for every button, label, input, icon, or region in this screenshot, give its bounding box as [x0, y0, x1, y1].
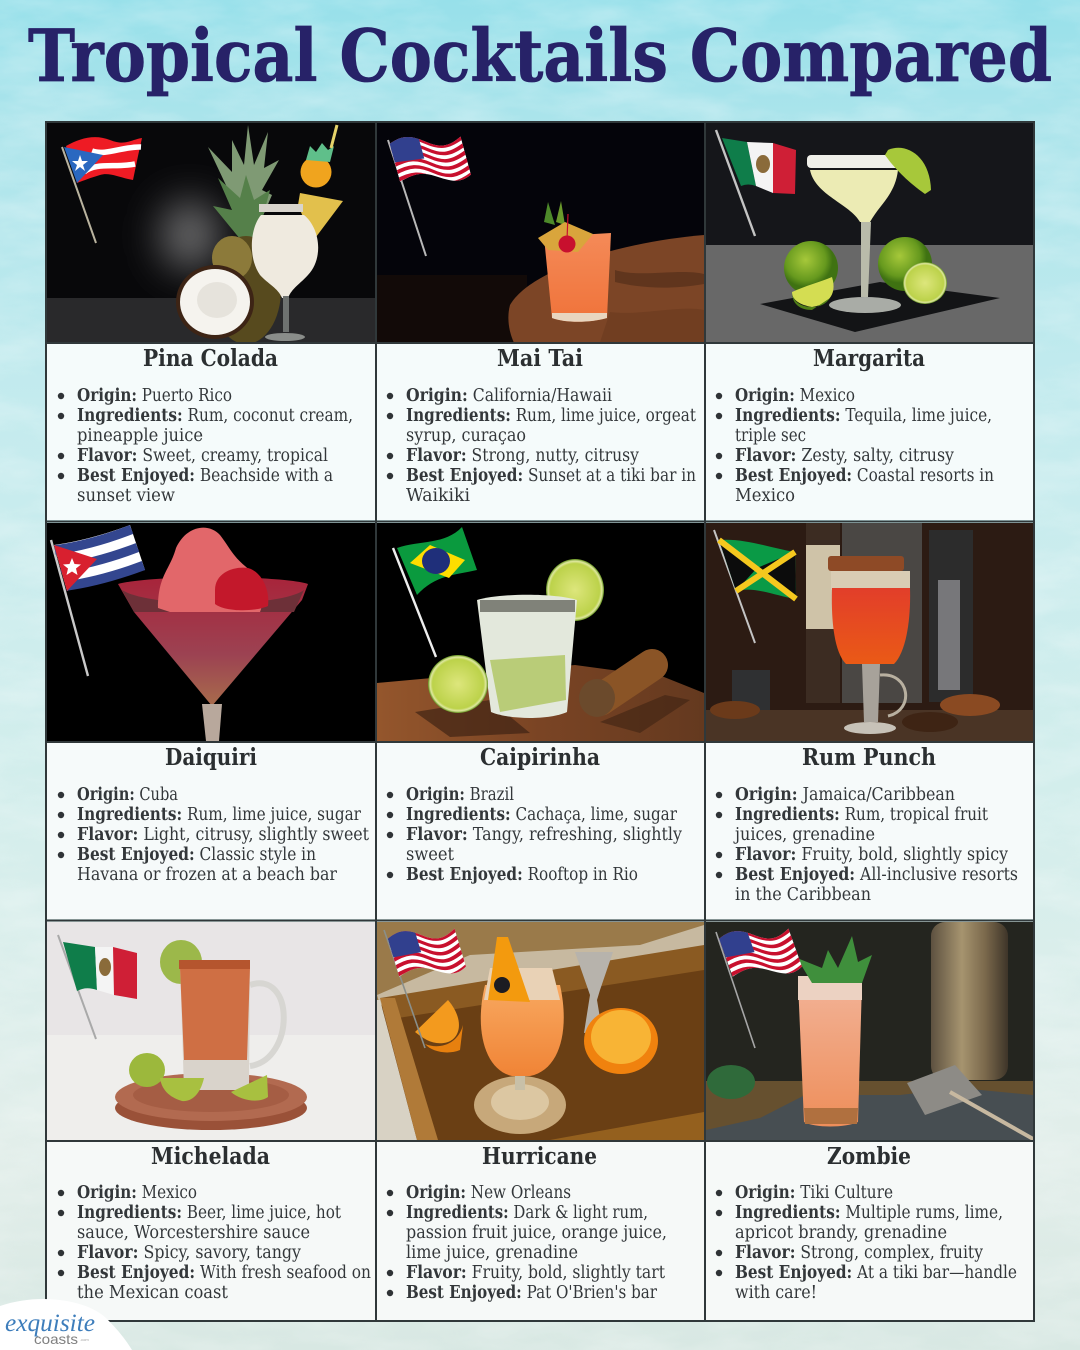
facts list: Flavor: Fruity, bold, slightly tart — [406, 1263, 665, 1283]
flag: Cuba — [51, 525, 145, 676]
logo: exquisite coasts — [0, 1299, 132, 1350]
facts list: Best Enjoyed: Rooftop in Rio — [406, 865, 638, 885]
facts list: sweet — [406, 845, 454, 865]
facts list: Ingredients: Multiple rums, lime, — [735, 1203, 1003, 1223]
text panel — [706, 1142, 1033, 1320]
heading: Daiquiri — [165, 744, 257, 771]
panel: Margarita — [706, 123, 1033, 520]
facts list: Flavor: Strong, complex, fruity — [735, 1243, 983, 1263]
heading: Pina Colada — [143, 345, 278, 372]
facts list: Origin: Cuba — [77, 785, 178, 805]
facts list: Best Enjoyed: Coastal resorts in — [735, 466, 994, 486]
facts list: with care! — [735, 1283, 817, 1303]
flag: Mexico — [58, 935, 137, 1039]
panel: Michelada — [47, 922, 375, 1320]
flag: Brazil — [393, 527, 477, 657]
facts list — [387, 1183, 667, 1303]
text panel — [47, 743, 375, 919]
text panel — [706, 344, 1033, 520]
flag: Jamaica — [714, 530, 796, 643]
facts list: syrup, curaçao — [406, 426, 526, 446]
facts list: lime juice, grenadine — [406, 1243, 578, 1263]
facts list — [58, 785, 369, 885]
facts list: Origin: Mexico — [77, 1183, 197, 1203]
facts list: apricot brandy, grenadine — [735, 1223, 947, 1243]
panel: Pina Colada — [47, 123, 375, 520]
panel: Mai Tai — [377, 123, 704, 520]
facts list: Flavor: Spicy, savory, tangy — [77, 1243, 301, 1263]
photo: mai tai on round wood table — [377, 123, 704, 345]
heading: Hurricane — [482, 1143, 597, 1170]
facts list: sunset view — [77, 486, 175, 506]
facts list: Best Enjoyed: Beachside with a — [77, 466, 333, 486]
flag: Puerto Rico — [62, 137, 142, 243]
photo: frozen strawberry daiquiri — [47, 523, 375, 741]
facts list: Origin: Brazil — [406, 785, 514, 805]
facts list — [58, 1183, 371, 1303]
flag: United States — [715, 928, 802, 1048]
facts list: Flavor: Strong, nutty, citrusy — [406, 446, 639, 466]
text panel — [706, 743, 1033, 919]
facts list: Mexico — [735, 486, 795, 506]
text panel — [47, 344, 375, 520]
text panel — [377, 1142, 704, 1320]
facts list: Origin: California/Hawaii — [406, 386, 612, 406]
text panel — [377, 344, 704, 520]
facts list: Origin: Jamaica/Caribbean — [735, 785, 955, 805]
facts list: pineapple juice — [77, 426, 203, 446]
facts list: Flavor: Fruity, bold, slightly spicy — [735, 845, 1008, 865]
heading: Mai Tai — [497, 345, 583, 372]
facts list — [58, 386, 353, 506]
photo: pina colada with pineapple and coconut — [47, 123, 375, 344]
facts list: in the Caribbean — [735, 885, 871, 905]
facts list: Waikiki — [406, 486, 470, 506]
heading: Michelada — [151, 1143, 270, 1170]
facts list — [387, 785, 682, 885]
facts list: Best Enjoyed: With fresh seafood on — [77, 1263, 371, 1283]
text panel — [47, 1142, 375, 1320]
panel: Hurricane — [377, 922, 704, 1320]
flag: United States — [383, 928, 466, 1048]
facts list: Origin: Mexico — [735, 386, 855, 406]
facts list: passion fruit juice, orange juice, — [406, 1223, 667, 1243]
facts list — [716, 386, 994, 506]
text panel — [377, 743, 704, 919]
facts list: Best Enjoyed: Sunset at a tiki bar in — [406, 466, 696, 486]
facts list — [716, 785, 1018, 905]
photo: rum punch at a bar — [706, 523, 1033, 741]
facts list — [387, 386, 696, 506]
facts list: Best Enjoyed: At a tiki bar—handle — [735, 1263, 1017, 1283]
photo: michelada mug on wood board — [47, 922, 375, 1140]
facts list — [716, 1183, 1017, 1303]
facts list: Best Enjoyed: All-inclusive resorts — [735, 865, 1018, 885]
facts list: Best Enjoyed: Classic style in — [77, 845, 316, 865]
panel: Daiquiri — [47, 523, 375, 919]
facts list: Best Enjoyed: Pat O'Brien's bar — [406, 1283, 658, 1303]
facts list: Origin: Tiki Culture — [735, 1183, 893, 1203]
facts list: Flavor: Light, citrusy, slightly sweet — [77, 825, 369, 845]
logo: exquisite coasts: exquisite — [5, 1310, 95, 1337]
facts list: the Mexican coast — [77, 1283, 228, 1303]
facts list: Ingredients: Rum, tropical fruit — [735, 805, 988, 825]
facts list: Ingredients: Tequila, lime juice, — [735, 406, 992, 426]
facts list: Ingredients: Rum, lime juice, sugar — [77, 805, 362, 825]
panel: Zombie — [706, 922, 1035, 1320]
facts list: Flavor: Sweet, creamy, tropical — [77, 446, 328, 466]
logo: exquisite coasts: .com — [80, 1337, 89, 1342]
panel: Caipirinha — [377, 523, 704, 919]
facts list: sauce, Worcestershire sauce — [77, 1223, 310, 1243]
facts list: triple sec — [735, 426, 806, 446]
photo: caipirinha with lime and muddler — [377, 523, 704, 741]
facts list: juices, grenadine — [733, 825, 875, 845]
panel: Rum Punch — [706, 523, 1033, 919]
facts list: Flavor: Zesty, salty, citrusy — [735, 446, 954, 466]
facts list: Ingredients: Rum, coconut cream, — [77, 406, 353, 426]
heading: Zombie — [827, 1143, 911, 1170]
photo: zombie highball with mint and shaker — [706, 922, 1035, 1140]
photo: hurricane on wooden tray — [377, 922, 704, 1140]
facts list: Havana or frozen at a beach bar — [77, 865, 338, 885]
facts list: Origin: New Orleans — [406, 1183, 571, 1203]
facts list: Ingredients: Dark & light rum, — [406, 1203, 648, 1223]
flag: Mexico — [716, 130, 796, 236]
facts list: Ingredients: Cachaça, lime, sugar — [406, 805, 678, 825]
logo: exquisite coasts: coasts — [34, 1331, 78, 1347]
flag: United States — [387, 136, 471, 256]
facts list: Ingredients: Beer, lime juice, hot — [77, 1203, 341, 1223]
facts list: Ingredients: Rum, lime juice, orgeat — [406, 406, 696, 426]
photo: margarita with limes on slate — [706, 123, 1033, 342]
heading: Margarita — [813, 345, 925, 372]
heading: Caipirinha — [480, 744, 600, 771]
facts list: Flavor: Tangy, refreshing, slightly — [406, 825, 682, 845]
heading: Rum Punch — [802, 744, 936, 771]
facts list: Origin: Puerto Rico — [77, 386, 232, 406]
